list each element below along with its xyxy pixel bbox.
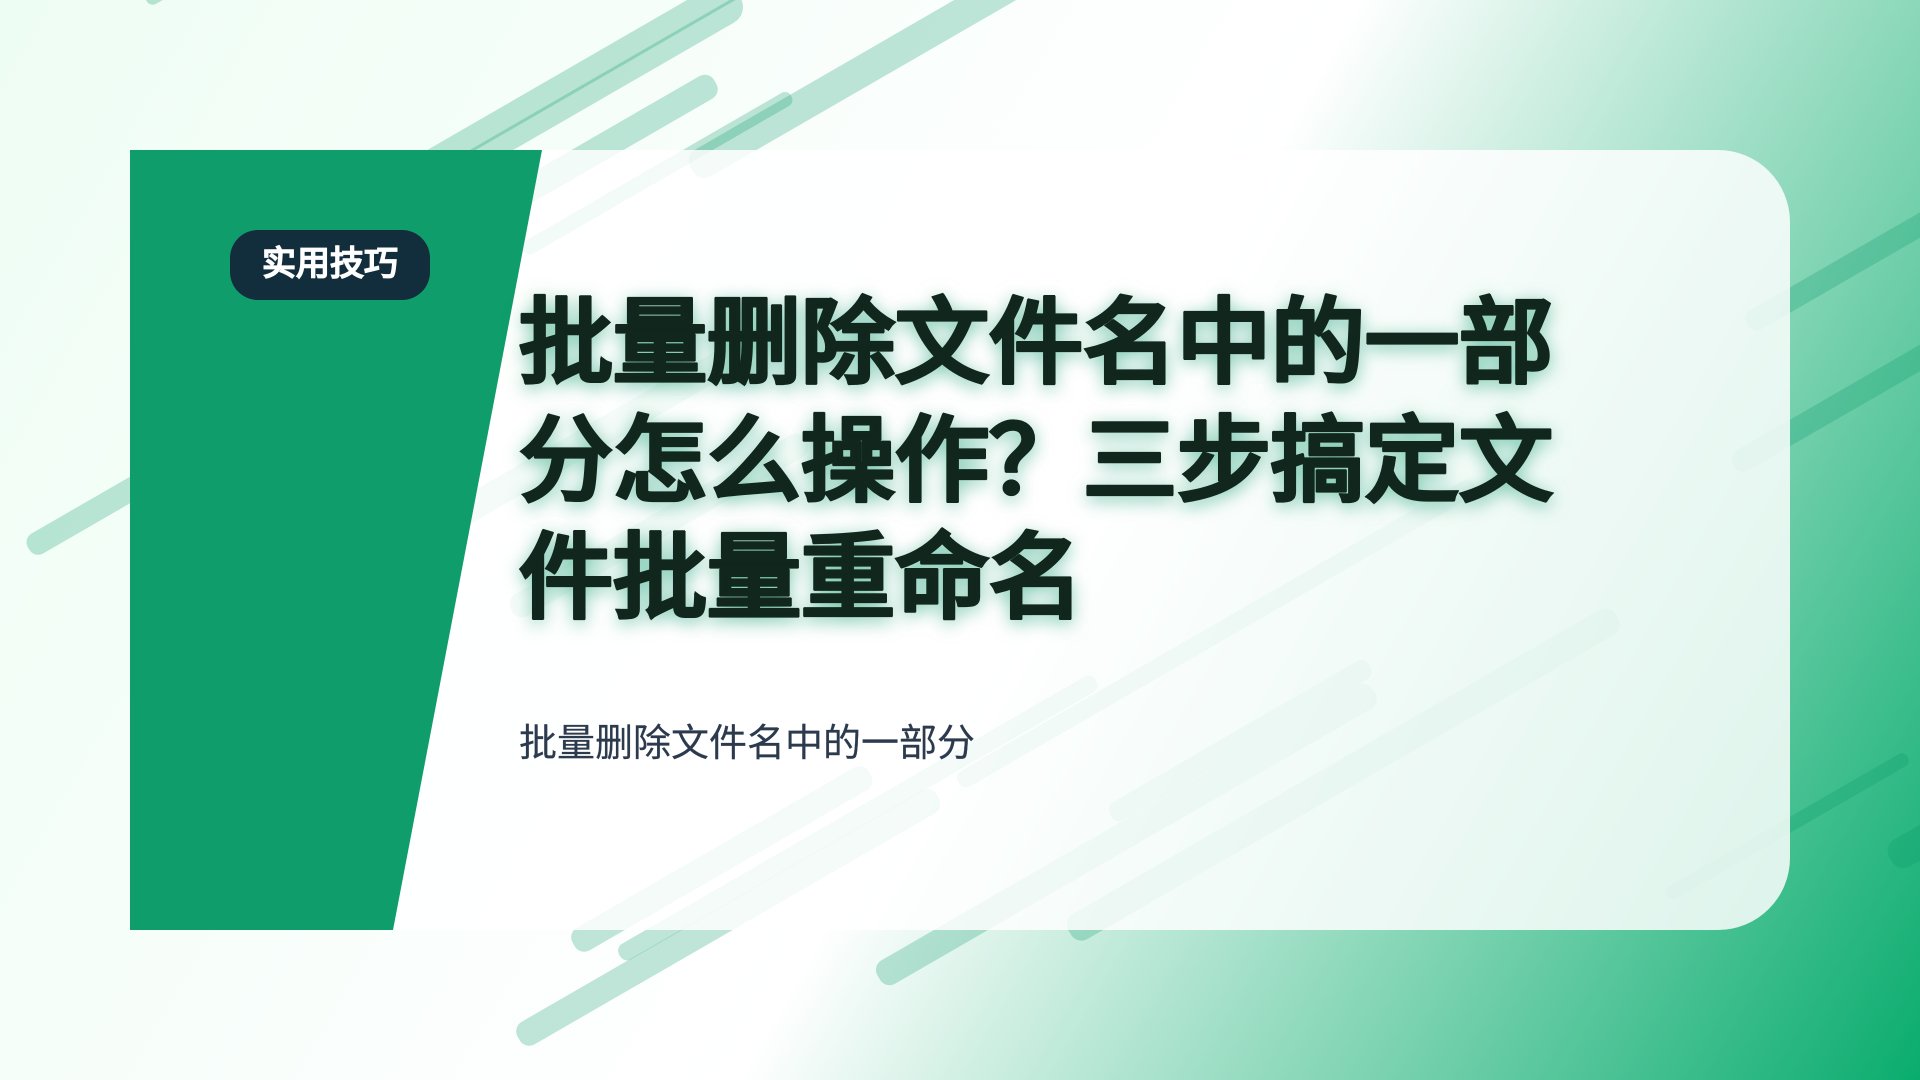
title: [511, 288, 1561, 634]
title: 批量删除文件名中的一部: [519, 290, 1553, 395]
tag: category label: [230, 230, 430, 300]
panel: translucent white card: [130, 150, 1790, 930]
tag: category label: 实用技巧: [262, 245, 398, 283]
title: 件批量重命名: [519, 525, 1083, 630]
subtitle: 批量删除文件名中的一部分: [519, 723, 975, 765]
title: 分怎么操作？三步搞定文: [519, 408, 1553, 512]
panel: green slanted wedge: [130, 150, 542, 930]
